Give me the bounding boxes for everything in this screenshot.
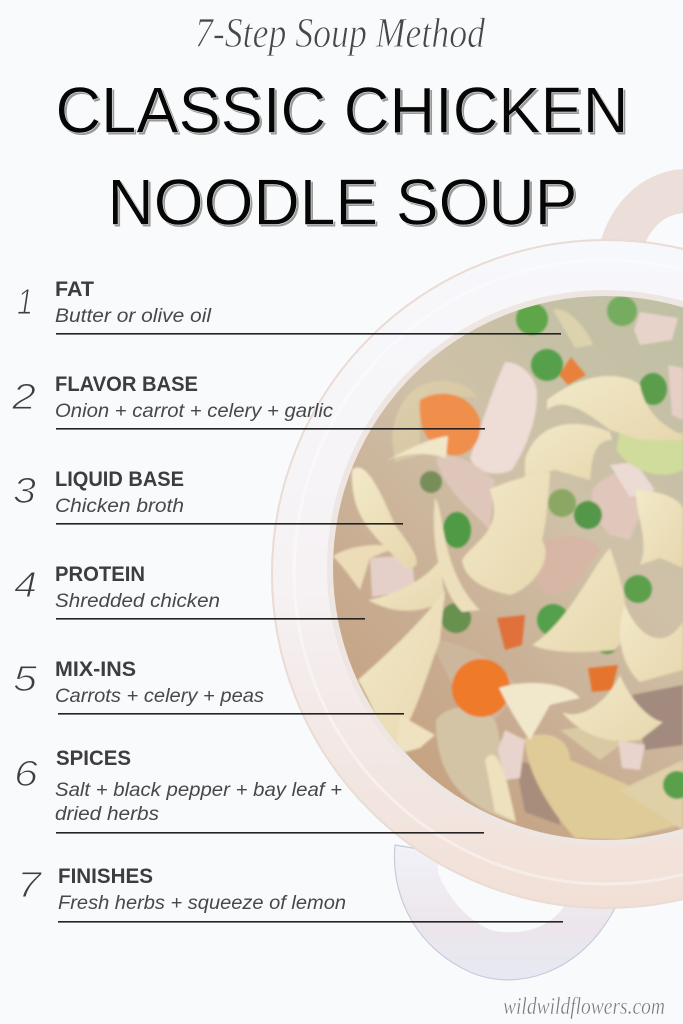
step 5: mix-ins: MIX-INS xyxy=(55,658,136,681)
title: main heading: NOODLE SOUP xyxy=(108,166,578,238)
bowl top handle xyxy=(600,169,683,246)
step 1: fat: FAT xyxy=(55,278,94,301)
step 1: fat xyxy=(17,278,561,335)
step 2: flavor base: FLAVOR BASE xyxy=(55,373,198,396)
step 3: liquid base: LIQUID BASE xyxy=(55,468,184,491)
step 5: mix-ins: Carrots + celery + peas xyxy=(55,685,264,707)
title: main heading: CLASSIC CHICKEN xyxy=(58,76,630,148)
title: script heading: 7-Step Soup Method xyxy=(195,11,486,57)
step 7: finishes: 7 xyxy=(17,864,43,905)
step 3: liquid base: 3 xyxy=(13,470,36,511)
step 3: liquid base: Chicken broth xyxy=(55,495,184,517)
step 7: finishes: Fresh herbs + squeeze of lemon xyxy=(58,892,346,914)
step 6: spices: Salt + black pepper + bay leaf + xyxy=(55,779,342,801)
step 4: protein: 4 xyxy=(14,564,37,605)
step 5: mix-ins: 5 xyxy=(13,658,38,699)
step 4: protein xyxy=(14,563,365,620)
noodles back xyxy=(392,381,477,462)
bowl rim xyxy=(272,240,683,908)
celery xyxy=(616,432,683,476)
title: main heading xyxy=(56,74,630,240)
step 7: finishes xyxy=(17,864,563,923)
step 2: flavor base: Onion + carrot + celery + garlic xyxy=(55,400,333,422)
title: main heading: NOODLE SOUP xyxy=(110,168,580,240)
step 1: fat: 1 xyxy=(17,281,33,322)
step 3: liquid base xyxy=(13,468,403,525)
title: main heading: CLASSIC CHICKEN xyxy=(56,74,628,146)
step 6: spices: 6 xyxy=(14,753,39,794)
step 7: finishes: FINISHES xyxy=(58,865,153,888)
step 6: spices: SPICES xyxy=(56,747,131,770)
step 6: spices xyxy=(14,747,484,834)
step 5: mix-ins xyxy=(13,658,404,715)
step 2: flavor base: 2 xyxy=(11,376,36,417)
noodles front xyxy=(391,434,450,459)
step 6: spices: dried herbs xyxy=(55,803,159,825)
bowl soup contents xyxy=(330,290,683,845)
photo: soup bowl xyxy=(272,169,683,980)
step 1: fat: Butter or olive oil xyxy=(55,305,212,327)
step 2: flavor base xyxy=(11,373,485,430)
darker broth patches xyxy=(632,685,683,750)
bowl bottom handle xyxy=(394,845,615,980)
carrots xyxy=(420,394,480,455)
step 4: protein: Shredded chicken xyxy=(55,590,220,612)
peas xyxy=(516,303,548,335)
step 4: protein: PROTEIN xyxy=(55,563,145,586)
chicken xyxy=(470,362,537,474)
